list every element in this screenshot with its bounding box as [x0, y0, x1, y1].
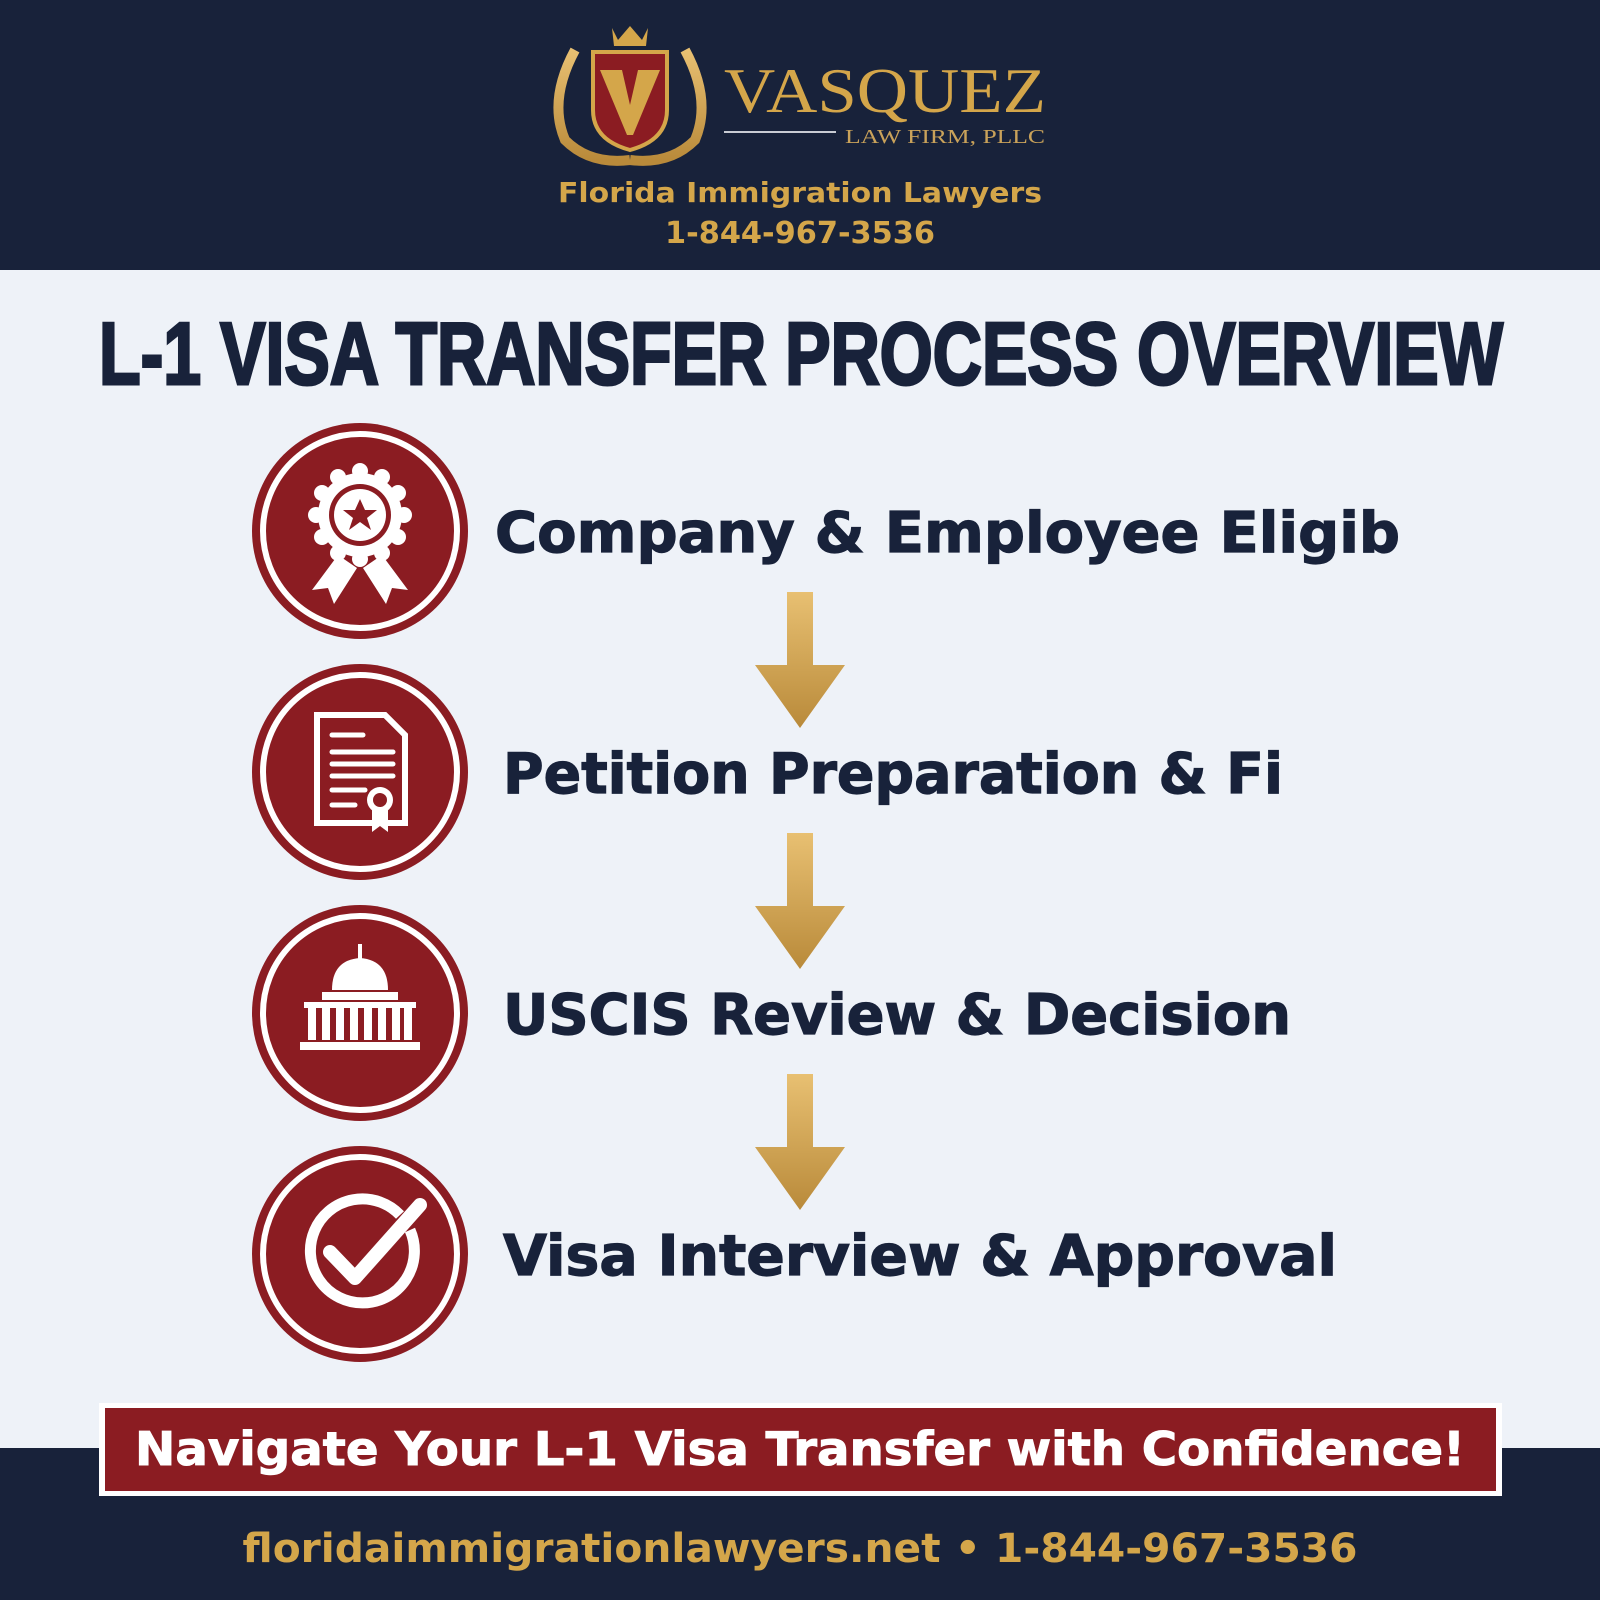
footer contact: floridaimmigrationlawyers.net • 1-844-967-3536	[242, 1526, 1357, 1572]
step 2 icon: document	[252, 664, 468, 880]
header tagline: Florida Immigration Lawyers	[558, 176, 1042, 209]
step 1 icon: award	[252, 423, 468, 639]
footer panel	[0, 1448, 1600, 1600]
header phone: 1-844-967-3536	[665, 216, 935, 251]
logo crest	[558, 26, 702, 161]
arrow 3	[755, 1074, 845, 1210]
logo wordmark: LAW FIRM, PLLC	[845, 126, 1045, 148]
CTA banner	[99, 1403, 1502, 1496]
logo wordmark	[724, 55, 1046, 148]
step 3 label: USCIS Review & Decision	[503, 983, 1291, 1048]
step 1 label: Company & Employee Eligib	[495, 501, 1400, 566]
logo wordmark: VASQUEZ	[724, 55, 1046, 126]
step 4 label: Visa Interview & Approval	[503, 1224, 1337, 1289]
step 3 icon: capitol	[252, 905, 468, 1121]
step 2 label: Petition Preparation & Fi	[503, 742, 1283, 807]
header panel	[0, 0, 1600, 270]
CTA banner: Navigate Your L-1 Visa Transfer with Confidence!	[135, 1422, 1465, 1476]
step 4 icon: check	[252, 1146, 468, 1362]
arrow 1	[755, 592, 845, 728]
arrow 2	[755, 833, 845, 969]
